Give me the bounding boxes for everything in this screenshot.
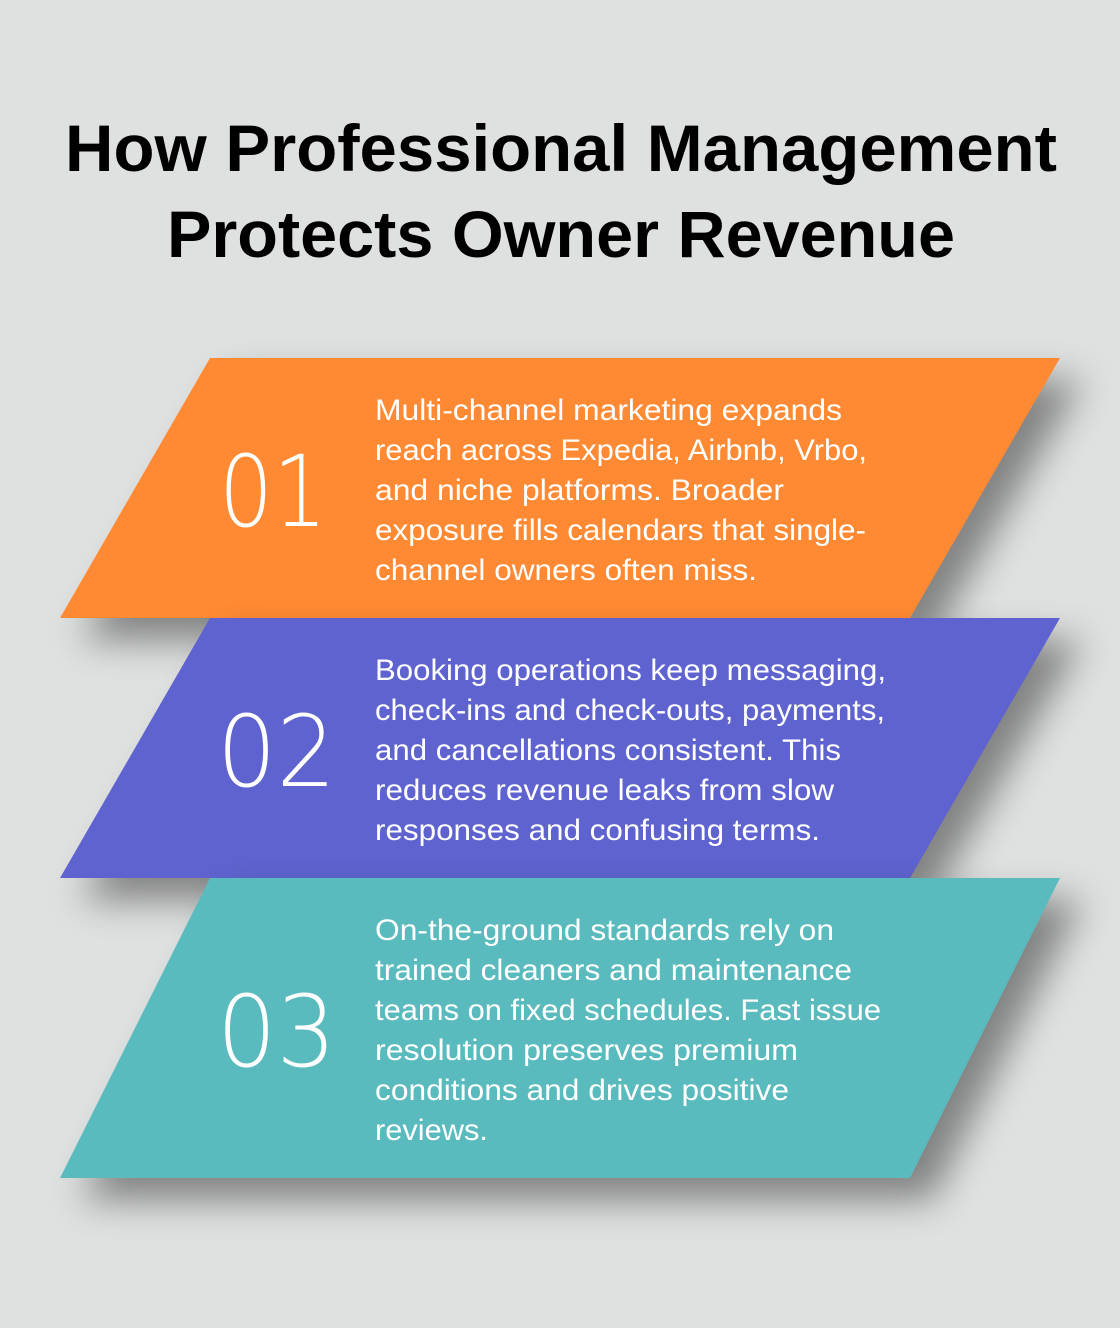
text block 02: and cancellations consistent. This (375, 734, 841, 767)
text block 01: reach across Expedia, Airbnb, Vrbo, (375, 434, 867, 467)
text block 03: reviews. (375, 1114, 488, 1147)
number 03: 03 (217, 975, 336, 1090)
text block 01: channel owners often miss. (375, 554, 757, 587)
text block 01 (375, 394, 867, 587)
text block 01: exposure fills calendars that single- (375, 514, 866, 547)
title (65, 111, 1057, 271)
number 02: 02 (217, 695, 336, 810)
text block 03 (375, 914, 881, 1147)
text block 01: and niche platforms. Broader (375, 474, 784, 507)
panel: step 01 multi-channel marketing (60, 358, 1060, 618)
text block 02: responses and confusing terms. (375, 814, 820, 847)
orange parallelogram (60, 358, 1060, 618)
blue parallelogram (60, 618, 1060, 878)
teal parallelogram (60, 878, 1060, 1178)
text block 02 (375, 654, 886, 847)
text block 02: reduces revenue leaks from slow (375, 774, 834, 807)
panel: step 02 booking operations (60, 618, 1060, 878)
title: How Professional Management (65, 111, 1057, 185)
text block 02: Booking operations keep messaging, (375, 654, 886, 687)
text block 03: conditions and drives positive (375, 1074, 789, 1107)
text block 03: On-the-ground standards rely on (375, 914, 834, 947)
panel: step 03 on-the-ground standards (60, 878, 1060, 1178)
number 01: 01 (219, 435, 327, 550)
title: Protects Owner Revenue (167, 197, 955, 271)
text block 03: trained cleaners and maintenance (375, 954, 852, 987)
text block 03: teams on fixed schedules. Fast issue (375, 994, 881, 1027)
text block 01: Multi-channel marketing expands (375, 394, 842, 427)
text block 03: resolution preserves premium (375, 1034, 798, 1067)
text block 02: check-ins and check-outs, payments, (375, 694, 885, 727)
